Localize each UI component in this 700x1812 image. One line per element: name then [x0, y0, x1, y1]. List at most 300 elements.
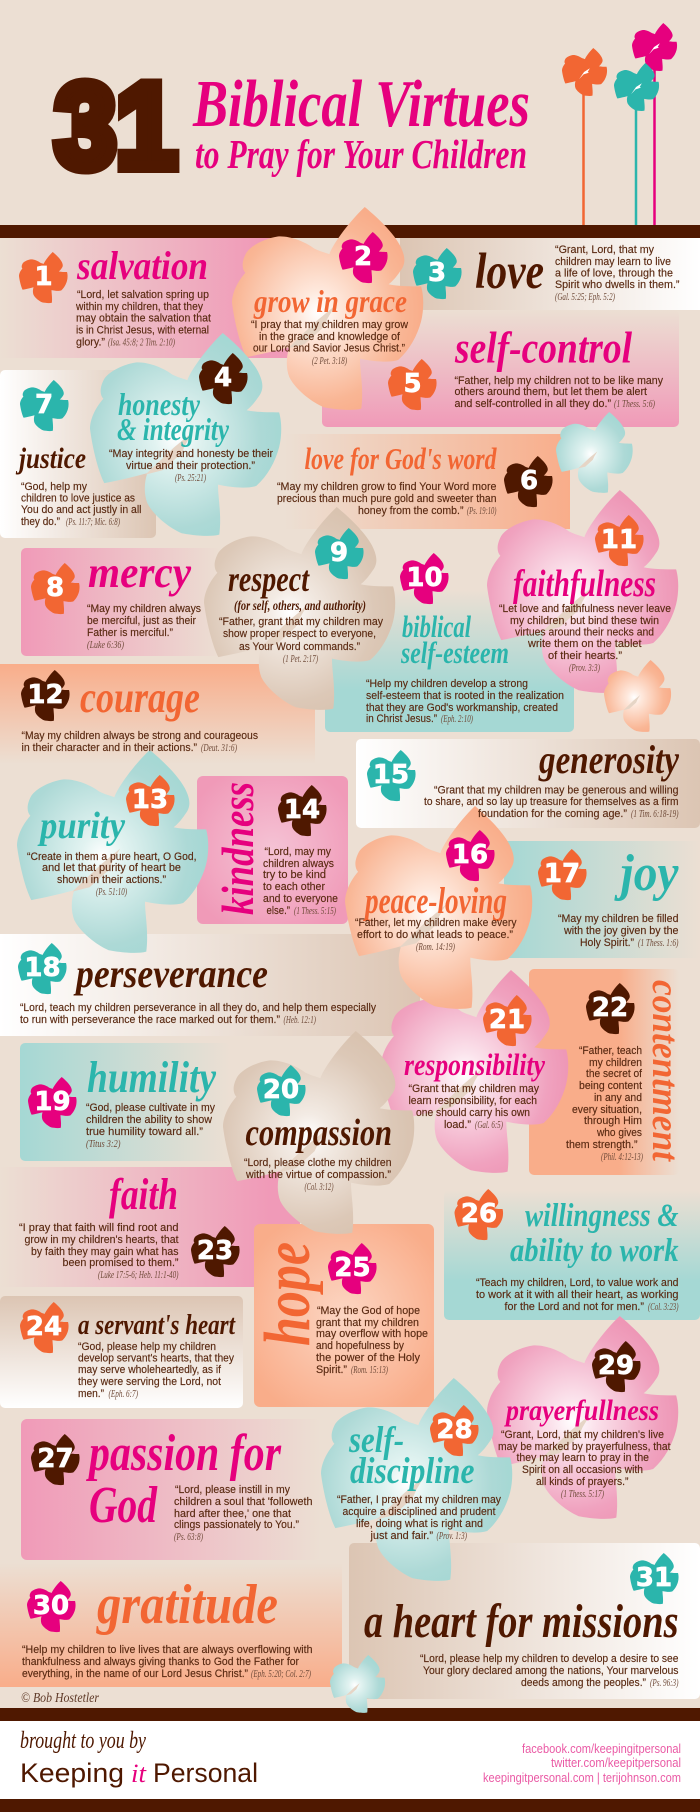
prayer text 24: men.”: [78, 1388, 104, 1400]
number flower 14: 14: [284, 795, 320, 825]
heading: love: love: [475, 244, 544, 300]
panel: a heart for missions: [349, 1543, 700, 1699]
heading: faith: faith: [109, 1170, 178, 1219]
prayer text 9: show proper respect to everyone,: [223, 628, 376, 640]
number flower 11: [595, 515, 644, 566]
prayer text 26: (Col. 3:23): [648, 1302, 679, 1313]
number flower 20: [257, 1065, 306, 1116]
virtue 13: purity: [27, 775, 196, 898]
prayer text 25: Spirit.”: [316, 1364, 347, 1376]
prayer text 22: them strength.”: [566, 1139, 638, 1151]
number flower 26: [454, 1189, 503, 1240]
footer: Keeping it Personal logo: [20, 1758, 258, 1788]
prayer text 13: shown in their actions.”: [57, 874, 166, 886]
prayer text 20: (Col. 3:12): [304, 1182, 334, 1193]
number flower 19: 19: [34, 1087, 71, 1117]
prayer text 19: “God, please cultivate in my: [86, 1102, 216, 1114]
prayer text 10: [366, 678, 564, 725]
prayer text 28: acquire a disciplined and prudent: [342, 1506, 496, 1518]
panel: courage: [0, 664, 315, 764]
prayer text 31: Your glory declared among the nations, Your marvelous: [423, 1665, 679, 1677]
prayer text 14: (1 Thess. 5:15): [294, 906, 336, 917]
prayer text 25: the power of the Holy: [316, 1352, 421, 1364]
footer: brought to you by: brought to you by: [20, 1728, 146, 1754]
heading: love for God's word: love for God's word: [304, 441, 497, 476]
heading: courage: courage: [80, 673, 200, 722]
virtue 1: salvation: [19, 243, 211, 348]
virtue 25: hope: [251, 1242, 428, 1376]
prayer text 24: “God, please help my children: [78, 1341, 216, 1353]
number flower 30: 30: [33, 1591, 69, 1621]
heading: peace-loving: peace-loving: [363, 881, 507, 922]
prayer text 21: load.”: [444, 1119, 471, 1131]
number flower 5: 5: [403, 369, 422, 399]
virtue 21: responsibility: [404, 995, 545, 1131]
prayer text 2: our Lord and Savior Jesus Christ.”: [253, 342, 405, 354]
panel: love for God's word: [285, 434, 570, 529]
prayer text 17: [558, 913, 679, 949]
prayer text 25: “May the God of hope: [317, 1305, 420, 1317]
prayer text 9: as Your Word commands.”: [239, 641, 360, 653]
footer: links: twitter.com/keepitpersonal: [551, 1755, 681, 1770]
prayer text 13: [27, 851, 196, 898]
prayer text 7: [21, 481, 142, 528]
heading: grow in grace: grow in grace: [253, 283, 407, 319]
panel: gratitude: [0, 1563, 342, 1687]
virtue 28: self-discipline: [337, 1405, 502, 1542]
decorative flower: teal, bottom: [330, 1655, 385, 1713]
prayer text 12: (Deut. 31:6): [201, 743, 237, 754]
heading: willingness and ability to work: [510, 1198, 679, 1269]
number flower 1: [19, 252, 68, 303]
prayer text 28: life, doing what is right and: [356, 1518, 483, 1530]
panel: passion for God: [21, 1419, 321, 1560]
panel: justice: [0, 370, 156, 538]
number flower 16: [446, 830, 495, 881]
heading: self-discipline: discipline: [350, 1451, 474, 1492]
prayer text 13: “Create in them a pure heart, O God,: [27, 851, 196, 863]
prayer text 26: “Teach my children, Lord, to value work and: [476, 1277, 678, 1289]
number flower 19: [28, 1077, 77, 1128]
panel: joy: [504, 841, 700, 958]
prayer text 11: of their hearts.”: [548, 650, 622, 662]
panel: contentment: [529, 969, 679, 1175]
prayer text 2: “I pray that my children may grow: [251, 319, 408, 331]
heading: humility: humility: [87, 1053, 216, 1102]
prayer text 1: glory.”: [76, 336, 105, 348]
prayer text 2: in the grace and knowledge of: [259, 331, 401, 343]
prayer text 24: [78, 1341, 235, 1400]
prayer text 26: [476, 1277, 679, 1313]
prayer text 26: to work at it with all their heart, as working: [476, 1289, 678, 1301]
number flower 28: 28: [436, 1415, 473, 1445]
number flower 29: 29: [598, 1351, 634, 1381]
prayer text 22: (Phil. 4:12-13): [601, 1152, 643, 1163]
number flower 30: [27, 1581, 76, 1632]
prayer text 3: [555, 244, 680, 303]
number flower 28: [430, 1405, 479, 1456]
virtue 20: compassion: [244, 1065, 392, 1193]
big flower: compassion: [223, 1031, 414, 1234]
prayer text 17: “May my children be filled: [558, 913, 678, 925]
panel: willingness and ability to work: [444, 1190, 700, 1320]
prayer text 5: and self-controlled in all they do.”: [454, 398, 611, 410]
number flower 8: 8: [46, 573, 64, 603]
number flower 18: [18, 943, 67, 994]
prayer text 11: (Prov. 3:3): [569, 663, 600, 674]
virtue 7: justice: [16, 380, 141, 528]
prayer text 13: (Ps. 51:10): [96, 887, 127, 898]
heading: gratitude: gratitude: [95, 1574, 278, 1636]
prayer text 1: “Lord, let salvation spring up: [77, 289, 209, 301]
number flower 4: [199, 353, 248, 404]
prayer text 27: hard after thee,' one that: [174, 1508, 291, 1520]
big flower: responsibility: [381, 970, 568, 1173]
prayer text 6: [277, 481, 497, 517]
heading: self-discipline: self-: [348, 1420, 404, 1461]
virtue 12: courage: [21, 670, 259, 754]
prayer text 23: by faith they may gain what has: [31, 1246, 179, 1258]
virtue 18: perseverance: [18, 943, 377, 1026]
prayer text 4: [109, 448, 273, 484]
prayer text 15: [424, 784, 679, 820]
number flower 27: 27: [37, 1444, 74, 1474]
prayer text 28: “Father, I pray that my children may: [337, 1494, 502, 1506]
prayer text 24: may serve wholeheartedly, as if: [78, 1364, 222, 1376]
prayer text 6: honey from the comb.”: [358, 505, 464, 517]
number flower 21: [483, 995, 532, 1046]
prayer text 29: may be marked by prayerfulness, that: [498, 1441, 670, 1453]
lower brown band: [0, 1708, 700, 1721]
prayer text 14: else.”: [266, 905, 290, 917]
number flower 2: [339, 232, 388, 283]
number flower 24: 24: [26, 1312, 62, 1342]
number flower 3: 3: [428, 258, 446, 288]
virtue 10: biblical self-esteem: [366, 553, 564, 725]
heading: compassion: compassion: [246, 1112, 392, 1154]
number flower 31: 31: [636, 1563, 672, 1593]
prayer text 14: [263, 846, 338, 917]
title number 31: 31: [55, 59, 177, 193]
heading: purity: purity: [37, 805, 125, 847]
prayer text 31: “Lord, please help my children to develop a desire to see: [420, 1653, 678, 1665]
prayer text 16: “Father, let my children make every: [355, 917, 517, 929]
prayer text 16: [355, 917, 517, 953]
prayer text 13: and let that purity of heart be: [42, 862, 181, 874]
heading: perseverance: perseverance: [73, 951, 268, 996]
prayer text 31: [420, 1653, 679, 1689]
prayer text 25: grant that my children: [316, 1317, 419, 1329]
prayer text 27: (Ps. 63:8): [174, 1532, 203, 1543]
prayer text 27: clings passionately to You.”: [174, 1519, 299, 1531]
number flower 23: 23: [197, 1236, 233, 1266]
prayer text 3: (Gal. 5:25; Eph. 5:2): [555, 292, 615, 303]
prayer text 25: (Rom. 15:13): [351, 1365, 388, 1376]
decorative flower: peach: [604, 660, 671, 732]
heading: biblical self-esteem: [400, 609, 509, 670]
header flower: pink: [632, 23, 677, 71]
number flower 12: 12: [27, 680, 64, 710]
prayer text 30: “Help my children to live lives that are always overflowing with: [22, 1644, 312, 1656]
prayer text 14: to each other: [263, 881, 325, 893]
prayer text 29: “Grant, Lord, that my children's live: [501, 1429, 664, 1441]
number flower 24: [20, 1302, 69, 1353]
big flower: purity: [17, 750, 208, 953]
prayer text 30: (Eph. 5:20; Col. 2:7): [251, 1669, 311, 1680]
number flower 29: [592, 1341, 641, 1392]
prayer text 8: Father is merciful.”: [87, 627, 173, 639]
prayer text 10: “Help my children develop a strong: [366, 678, 528, 690]
prayer text 8: (Luke 6:36): [87, 640, 125, 651]
prayer text 23: [19, 1222, 179, 1281]
big flower: respect: [204, 507, 395, 710]
prayer text 10: that they are God's workmanship, created: [366, 702, 558, 714]
number flower 31: [630, 1553, 679, 1604]
virtue 29: prayerfullness: [498, 1341, 670, 1500]
virtue 11: faithfulness: [499, 515, 671, 674]
heading: salvation: salvation: [76, 243, 208, 288]
number flower 27: [31, 1434, 80, 1485]
virtue 17: joy: [538, 845, 679, 949]
prayer text 22: my children: [589, 1057, 642, 1069]
prayer text 4: “May integrity and honesty be their: [109, 448, 273, 460]
number flower 11: 11: [601, 525, 637, 555]
number flower 7: [20, 380, 69, 431]
prayer text 24: they were serving the Lord, not: [78, 1376, 221, 1388]
virtue 22: contentment: [566, 980, 686, 1163]
heading: honesty and integrity: [117, 386, 230, 447]
prayer text 27: [174, 1484, 312, 1543]
subheading: for self, others, and authority: (for self, others, and authority): [234, 599, 366, 614]
bottom brown band: [0, 1799, 700, 1812]
prayer text 1: [75, 289, 211, 348]
prayer text 4: virtue and their protection.”: [126, 460, 255, 472]
big flower: prayerfullness: [487, 1316, 678, 1519]
number flower 22: [586, 983, 635, 1034]
number flower 3: [413, 248, 462, 299]
prayer text 19: (Titus 3:2): [86, 1139, 121, 1150]
prayer text 23: been promised to them.”: [62, 1257, 179, 1269]
virtue 3: love: [413, 244, 680, 303]
prayer text 5: (1 Thess. 5:6): [614, 399, 655, 410]
prayer text 3: Spirit who dwells in them.”: [555, 279, 680, 291]
prayer text 29: they may learn to pray in the: [516, 1452, 649, 1464]
virtue 23: faith: [19, 1170, 240, 1281]
prayer text 12: [22, 730, 259, 754]
heading: justice: justice: [16, 442, 86, 475]
prayer text 21: learn responsibility, for each: [408, 1095, 537, 1107]
prayer text 17: Holy Spirit.”: [580, 937, 634, 949]
prayer text 6: (Ps. 19:10): [467, 506, 497, 517]
prayer text 14: “Lord, may my: [264, 846, 332, 858]
prayer text 22: through Him: [584, 1115, 642, 1127]
header flower: teal: [614, 63, 659, 111]
prayer text 5: “Father, help my children not to be like many: [454, 375, 664, 387]
prayer text 15: “Grant that my children may be generous and willing: [434, 784, 678, 796]
prayer text 8: “May my children always: [87, 603, 202, 615]
number flower 10: 10: [406, 563, 443, 593]
panel: perseverance: [0, 934, 420, 1036]
prayer text 11: virtues around their necks and: [515, 626, 654, 638]
footer: Keeping it Personal logo: it: [131, 1759, 147, 1788]
big flower: self-discipline: [321, 1378, 512, 1581]
prayer text 18: to run with perseverance the race marked out for them.”: [20, 1014, 280, 1026]
number flower 18: 18: [24, 953, 61, 983]
prayer text 28: [337, 1494, 502, 1542]
prayer text 22: [566, 1045, 643, 1163]
prayer text 18: “Lord, teach my children perseverance in all they do, and help them especially: [20, 1002, 377, 1014]
prayer text 6: “May my children grow to find Your Word more: [277, 481, 496, 493]
prayer text 8: [87, 603, 202, 651]
prayer text 1: is in Christ Jesus, with eternal: [76, 324, 209, 336]
virtue 16: peace-loving: [355, 830, 517, 953]
prayer text 2: [251, 319, 408, 367]
prayer text 30: everything, in the name of our Lord Jesus Christ.”: [22, 1668, 248, 1680]
number flower 25: 25: [334, 1253, 371, 1283]
prayer text 29: [498, 1429, 670, 1500]
number flower 16: 16: [452, 840, 488, 870]
number flower 5: [388, 359, 437, 410]
big flower: grow in grace: [232, 207, 423, 410]
prayer text 14: and to everyone: [263, 893, 338, 905]
virtue 19: humility: [28, 1053, 216, 1150]
prayer text 23: “I pray that faith will find root and: [19, 1222, 179, 1234]
big flower: honesty and integrity: [90, 333, 281, 536]
prayer text 10: (Eph. 2:10): [441, 714, 473, 725]
number flower 8: [31, 563, 80, 614]
header flower stems: [584, 66, 654, 225]
prayer text 14: try to be kind: [263, 869, 326, 881]
prayer text 27: “Lord, please instill in my: [175, 1484, 291, 1496]
prayer text 5: others around them, but let them be alert: [454, 386, 647, 398]
heading: hope, vertical: hope: [251, 1242, 324, 1346]
prayer text 2: (2 Pet. 3:18): [312, 356, 347, 367]
prayer text 11: [499, 603, 671, 674]
prayer text 7: they do.”: [21, 516, 60, 528]
number flower 10: [400, 553, 449, 604]
heading: passion for God: [86, 1425, 282, 1534]
virtue 24: a servant's heart: [20, 1302, 236, 1400]
panel: generosity: [356, 739, 700, 828]
virtue 26: willingness and ability to work: [454, 1189, 679, 1313]
heading: passion for God: passion for: [86, 1425, 282, 1482]
virtue 5: self-control: [388, 324, 664, 410]
prayer text 29: Spirit on all occasions with: [522, 1464, 643, 1476]
prayer text 21: one should carry his own: [416, 1107, 530, 1119]
prayer text 9: “Father, grant that my children may: [219, 616, 384, 628]
title: [192, 67, 530, 177]
prayer text 19: children the ability to show: [86, 1114, 212, 1126]
number flower 17: 17: [544, 859, 580, 889]
prayer text 17: with the joy given by the: [563, 925, 678, 937]
panel: kindness: [197, 776, 348, 924]
prayer text 23: (Luke 17:5-6; Heb. 11:1-40): [98, 1270, 179, 1281]
number flower 2: 2: [354, 242, 372, 272]
prayer text 9: (1 Pet. 2:17): [283, 654, 318, 665]
prayer text 25: [316, 1305, 428, 1376]
prayer text 29: all kinds of prayers.”: [536, 1476, 629, 1488]
virtue 6: love for God's word: [277, 441, 553, 517]
virtue 31: a heart for missions: [364, 1553, 679, 1689]
panel: humility: [20, 1043, 230, 1161]
panel: faith: [0, 1167, 300, 1287]
prayer text 29: (1 Thess. 5:17): [561, 1489, 604, 1500]
prayer text 17: (1 Thess. 1:6): [638, 938, 679, 949]
prayer text 15: (1 Tim. 6:18-19): [631, 809, 679, 820]
prayer text 22: being content: [579, 1080, 642, 1092]
prayer text 27: children a soul that 'followeth: [174, 1496, 312, 1508]
heading: honesty and integrity: & integrity: [117, 411, 230, 447]
prayer text 22: “Father, teach: [579, 1045, 642, 1057]
heading: responsibility: responsibility: [404, 1047, 545, 1082]
heading: self-discipline: [348, 1420, 474, 1492]
prayer text 20: [244, 1157, 392, 1193]
prayer text 30: thankfulness and always giving thanks to God the Father for: [22, 1656, 299, 1668]
copyright: © Bob Hostetler: [21, 1691, 99, 1706]
prayer text 15: foundation for the coming age.”: [478, 808, 627, 820]
virtue 27: passion for God: [31, 1425, 312, 1543]
prayer text 1: (Isa. 45:8; 2 Tim. 2:10): [108, 338, 175, 348]
number flower 15: 15: [373, 760, 409, 790]
prayer text 10: self-esteem that is rooted in the realization: [366, 690, 564, 702]
panel: biblical self-esteem: [325, 590, 574, 732]
heading: self-control: self-control: [454, 324, 633, 372]
prayer text 25: and hopefulness by: [316, 1340, 405, 1352]
panel: mercy: [21, 548, 221, 656]
number flower 7: 7: [35, 390, 53, 420]
prayer text 22: in any and: [594, 1092, 642, 1104]
prayer text 5: [454, 375, 664, 410]
heading: faithfulness: faithfulness: [513, 563, 656, 605]
number flower 6: [504, 456, 553, 507]
prayer text 31: deeds among the peoples.”: [521, 1677, 646, 1689]
prayer text 14: children always: [263, 858, 335, 870]
panel: love: [400, 238, 700, 310]
prayer text 3: “Grant, Lord, that my: [555, 244, 655, 256]
prayer text 11: write them on the tablet: [527, 638, 642, 650]
prayer text 24: develop servant's hearts, that they: [78, 1352, 235, 1364]
number flower 26: 26: [461, 1199, 497, 1229]
panel: salvation: [0, 238, 290, 358]
prayer text 28: just and fair.”: [369, 1530, 433, 1542]
prayer text 7: “God, help my: [21, 481, 88, 493]
prayer text 7: (Ps. 11:7; Mic. 6:8): [66, 517, 120, 528]
prayer text 20: “Lord, please clothe my children: [244, 1157, 392, 1169]
prayer text 9: [219, 616, 384, 665]
prayer text 22: who gives: [596, 1127, 643, 1139]
prayer text 21: [408, 1083, 540, 1131]
prayer text 21: (Gal. 6:5): [475, 1120, 503, 1131]
top brown band: [0, 225, 700, 238]
heading: kindness, vertical: kindness: [212, 782, 263, 915]
footer: links: [483, 1741, 681, 1785]
number flower 6: 6: [520, 466, 538, 496]
heading: willingness and ability to work: ability to work: [510, 1233, 679, 1269]
prayer text 30: [22, 1644, 312, 1680]
heading: contentment, vertical: contentment: [644, 980, 686, 1162]
prayer text 7: You do and act justly in all: [21, 504, 142, 516]
prayer text 16: (Rom. 14:19): [416, 942, 455, 953]
prayer text 28: (Prov. 1:3): [436, 1531, 467, 1542]
heading: prayerfullness: prayerfullness: [503, 1394, 659, 1427]
number flower 13: [126, 775, 175, 826]
prayer text 12: “May my children always be strong and courageous: [22, 730, 259, 742]
heading: a servant's heart: a servant's heart: [78, 1310, 236, 1341]
prayer text 15: to share, and so lay up treasure for themselves as a firm: [424, 796, 679, 808]
prayer text 1: may obtain the salvation that: [76, 312, 211, 324]
heading: mercy: mercy: [88, 548, 191, 597]
prayer text 24: (Eph. 6:7): [108, 1389, 138, 1400]
